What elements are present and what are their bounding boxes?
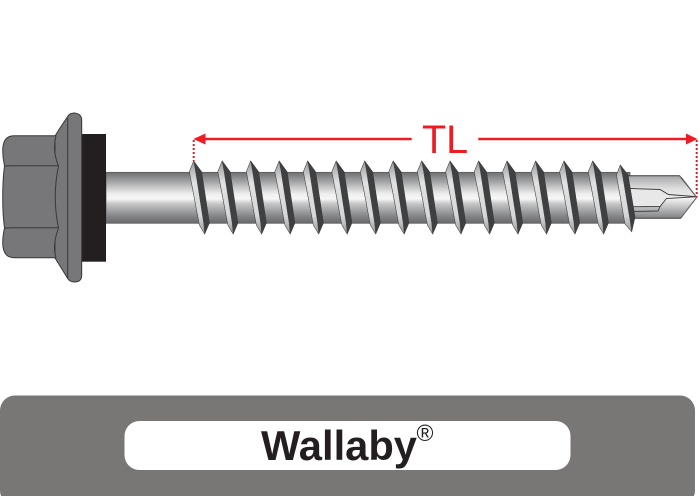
threads	[189, 161, 635, 234]
white name pill	[124, 421, 570, 470]
registered mark: ®	[416, 420, 434, 446]
product name: Wallaby	[261, 422, 418, 469]
screw illustration	[3, 113, 697, 282]
shank	[106, 172, 630, 223]
dimension: total length TL	[193, 118, 698, 197]
drill tip	[628, 176, 697, 218]
rubber washer	[81, 134, 106, 262]
left arrow	[193, 134, 412, 144]
name banner panel	[0, 396, 695, 496]
TL label: TL	[422, 118, 468, 162]
right arrow	[478, 134, 698, 144]
dotted extension lines	[194, 140, 697, 197]
hex head with flange	[3, 113, 82, 282]
